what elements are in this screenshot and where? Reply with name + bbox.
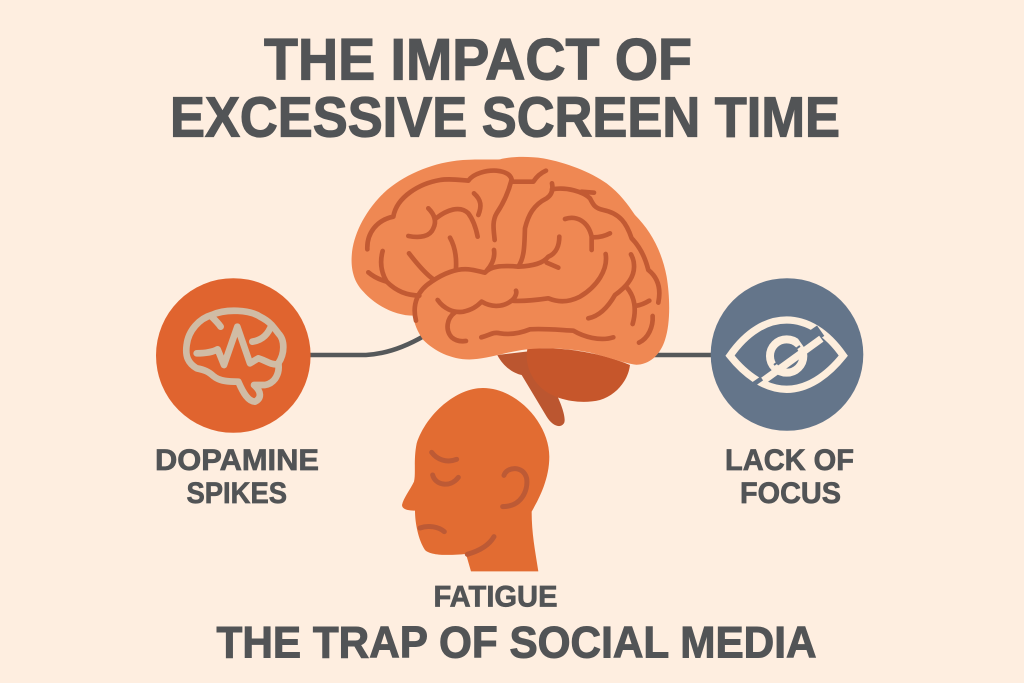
facial features [420,452,527,554]
connector: dopamine to brain [308,336,424,355]
label: dopamine spikes: DOPAMINE [155,444,319,477]
connector: brain to lack of focus [650,353,713,357]
label: dopamine spikes: SPIKES [186,477,287,510]
illustration: brain [352,157,669,426]
title: THE IMPACT OF [264,28,692,92]
title: EXCESSIVE SCREEN TIME [170,86,840,150]
label: lack of focus: LACK OF [725,444,854,477]
head silhouette [402,388,549,571]
brain stem [497,350,565,426]
icon: crossed-out eye [711,278,863,431]
label: dopamine spikes [155,444,319,510]
brain folds [367,171,659,343]
cerebrum [352,157,669,365]
title [170,28,840,150]
label: lack of focus [725,444,854,510]
label: fatigue: FATIGUE [434,580,558,614]
illustration: tired head [402,388,549,571]
cerebellum [527,348,630,402]
label: lack of focus: FOCUS [740,477,841,510]
icon: dopamine brain with pulse [156,278,311,433]
footer heading: THE TRAP OF SOCIAL MEDIA [216,618,816,667]
